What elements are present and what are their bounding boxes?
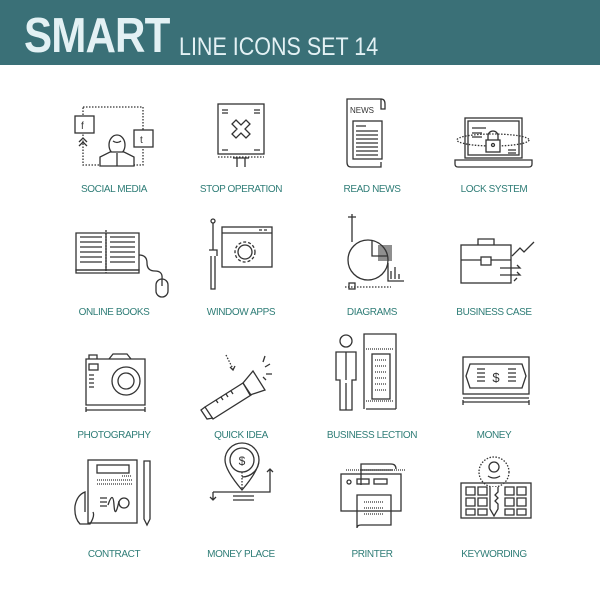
label: online books: ONLINE BOOKS: [79, 307, 149, 318]
icon: stop operation: [218, 104, 264, 167]
label: quick idea: QUICK IDEA: [214, 430, 268, 441]
icon: printer: [341, 464, 406, 528]
header bar: [0, 0, 600, 65]
icon: social media: f: [81, 121, 84, 132]
icon: money: [463, 357, 529, 405]
label: keywording: KEYWORDING: [461, 549, 527, 560]
label: lock system: LOCK SYSTEM: [461, 184, 527, 195]
icon: social media: t: [140, 135, 143, 146]
label: photography: PHOTOGRAPHY: [77, 430, 151, 441]
label: business case: BUSINESS CASE: [456, 307, 532, 318]
icon: quick idea: [201, 355, 272, 419]
icon: social media: [75, 107, 153, 166]
icon: money place: [210, 443, 273, 500]
label: read news: READ NEWS: [344, 184, 400, 195]
label: money place: MONEY PLACE: [207, 549, 275, 560]
label: money: MONEY: [477, 430, 511, 441]
label: stop operation: STOP OPERATION: [200, 184, 282, 195]
icon: read news: [347, 99, 385, 167]
icon: online books: [76, 230, 168, 297]
icon: business case: [461, 239, 534, 283]
icon: lock system: [455, 118, 532, 167]
label: diagrams: DIAGRAMS: [347, 307, 397, 318]
label: business lection: BUSINESS LECTION: [327, 430, 417, 441]
label: contract: CONTRACT: [88, 549, 140, 560]
icon: photography: [86, 354, 145, 412]
icon: money: $: [492, 370, 500, 385]
icon: money place: $: [239, 454, 246, 468]
label: window apps: WINDOW APPS: [207, 307, 275, 318]
title: SMART: [24, 9, 170, 63]
subtitle: LINE ICONS SET 14: [179, 33, 378, 61]
icon: contract: [75, 460, 150, 525]
icon: business lection: [336, 334, 396, 410]
icon: read news: NEWS: [350, 106, 374, 115]
label: printer: PRINTER: [351, 549, 393, 560]
icon: diagrams: [345, 214, 404, 289]
icon: keywording: [461, 457, 531, 518]
icon: window apps: [209, 219, 272, 289]
label: social media: SOCIAL MEDIA: [81, 184, 147, 195]
